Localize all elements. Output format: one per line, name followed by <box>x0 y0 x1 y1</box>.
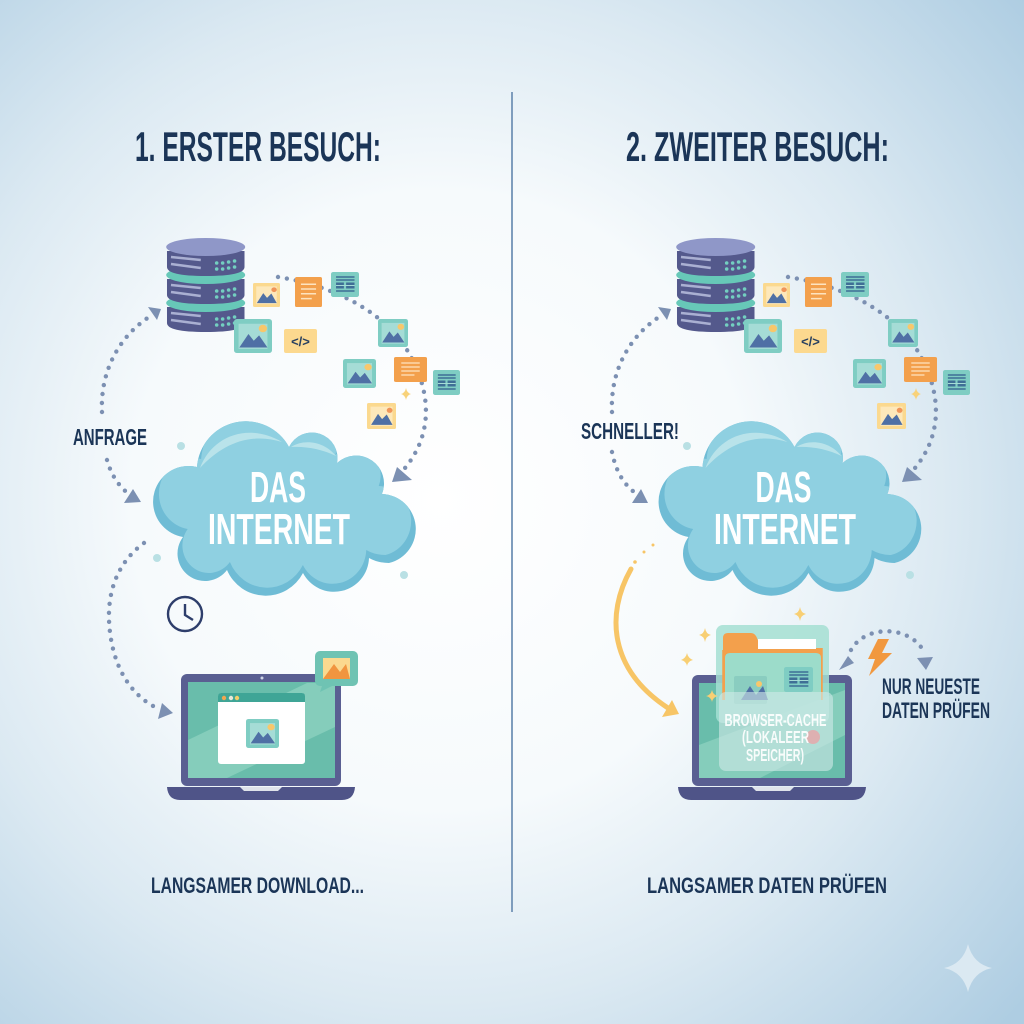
laptop <box>167 651 358 800</box>
icon: code <box>794 329 827 353</box>
icon: image <box>343 359 376 388</box>
icon: image <box>877 403 906 429</box>
icon: server stack <box>166 238 245 332</box>
icon: clock <box>168 597 202 631</box>
icon: document <box>394 357 427 382</box>
arrow: request to cloud <box>107 460 141 503</box>
icon: document <box>295 277 322 307</box>
panel: first visit <box>73 238 460 898</box>
decorative dots <box>153 442 408 579</box>
icon: layout page <box>841 272 869 297</box>
caption: LANGSAMER DATEN PRÜFEN <box>647 873 887 898</box>
arrow: data from server to cloud <box>278 277 426 482</box>
cloud <box>659 413 921 596</box>
caption: LANGSAMER DOWNLOAD... <box>151 873 364 898</box>
cloud: INTERNET <box>208 505 350 554</box>
arrow: request up to server <box>102 307 161 412</box>
arrow: fast yellow arrow <box>616 544 679 717</box>
icon: image <box>234 319 272 353</box>
cloud label: DAS <box>756 463 812 512</box>
icon: image <box>367 403 396 429</box>
cloud <box>153 413 416 596</box>
icon: layout page <box>433 370 460 395</box>
icon: small image <box>763 283 790 307</box>
icon: sparkle <box>911 388 921 400</box>
arrow: check loop <box>839 631 933 670</box>
icon: image <box>853 359 886 388</box>
icon: document <box>904 357 937 382</box>
glass label panel <box>719 692 833 771</box>
glass label panel: BROWSER-CACHE <box>724 710 826 730</box>
arrow: up to server <box>612 307 671 412</box>
laptop with cache <box>678 625 866 800</box>
cloud label: DAS <box>250 463 306 512</box>
image badge <box>315 651 358 692</box>
icon: layout page <box>331 272 359 297</box>
panel: second visit <box>581 238 990 898</box>
icon: small image <box>253 283 280 307</box>
icon: sparkle <box>401 388 411 400</box>
arrow: data from server to cloud <box>788 277 936 482</box>
icon: image <box>378 319 408 347</box>
icon: document <box>805 277 832 307</box>
glass label panel: SPEICHER) <box>746 745 804 765</box>
divider <box>511 92 513 912</box>
arrow: to cloud <box>612 452 648 503</box>
icon: layout page <box>943 370 970 395</box>
icon: code: </> <box>291 334 310 349</box>
icon: corner sparkle <box>944 944 992 992</box>
cloud: INTERNET <box>714 505 856 554</box>
icon: image <box>888 319 918 347</box>
icon: lightning <box>868 639 892 676</box>
label: only latest data <box>882 674 990 723</box>
decorative dots <box>683 442 914 579</box>
icon: code <box>284 329 317 353</box>
label: Anfrage: ANFRAGE <box>73 424 147 450</box>
browser cache folder <box>716 625 829 723</box>
label: Schneller: SCHNELLER! <box>581 418 679 444</box>
icon: code: </> <box>801 334 820 349</box>
browser window <box>218 693 305 764</box>
title: left: 1. ERSTER BESUCH: <box>135 123 381 170</box>
arrow: cloud to laptop <box>109 543 173 719</box>
sparkles <box>681 607 806 702</box>
icon: image <box>744 319 782 353</box>
glass label panel: (LOKALEER <box>742 727 809 747</box>
icon: server stack <box>676 238 755 332</box>
